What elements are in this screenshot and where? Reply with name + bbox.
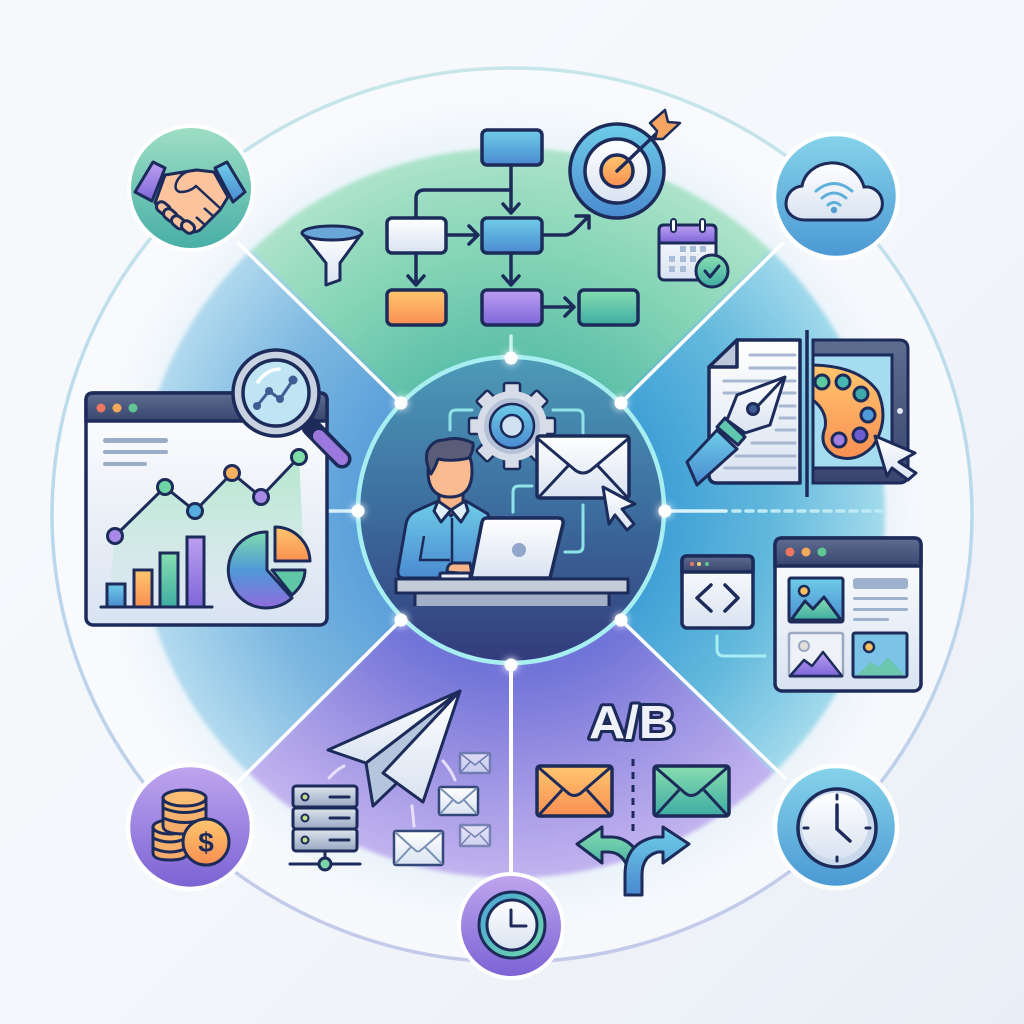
connector nodes — [352, 352, 672, 672]
neck — [439, 490, 463, 516]
spoke lines — [238, 243, 882, 880]
icon: paper plane — [328, 691, 460, 806]
panel halo — [119, 121, 903, 905]
collar — [434, 501, 468, 522]
left coin stack — [153, 820, 187, 860]
dashed divider — [632, 759, 634, 832]
panel: sending — [290, 691, 490, 870]
desk — [396, 579, 628, 606]
icon: coin stacks — [153, 790, 206, 860]
image tile 2 — [789, 633, 843, 677]
icon: orange envelope — [537, 766, 612, 816]
icon: gear — [469, 383, 555, 469]
connector lines — [450, 410, 583, 552]
icon: envelope — [537, 436, 629, 498]
line chart area — [108, 457, 306, 600]
icon: green envelope — [654, 766, 729, 816]
panel: analytics dashboard — [86, 350, 342, 625]
icon: funnel — [302, 226, 362, 285]
badge: right clock — [775, 766, 897, 888]
flowchart — [387, 130, 638, 325]
icon: pen nib — [687, 377, 785, 485]
layout text block — [853, 578, 908, 621]
flowchart boxes — [482, 130, 542, 165]
icon: web layout window — [775, 538, 921, 691]
segment: send and testing (purple) — [248, 622, 774, 880]
badge: cloud — [774, 134, 898, 258]
icon: envelope medium — [439, 787, 478, 815]
icon: server — [290, 786, 360, 870]
icon: cursor — [875, 436, 916, 480]
icon: split arrows — [577, 827, 689, 895]
browser window — [86, 393, 327, 625]
web window dots — [786, 548, 826, 556]
icon: laptop — [471, 518, 563, 578]
icon: target with arrow — [570, 110, 680, 218]
motion arcs — [329, 761, 455, 826]
A/B label: A/B — [589, 696, 675, 748]
icon: magnifier — [233, 350, 342, 459]
badge: handshake — [129, 126, 253, 250]
outer ring — [52, 68, 972, 962]
connector — [717, 636, 765, 656]
panel: code and web layout — [682, 538, 921, 691]
hair — [426, 439, 473, 474]
hand — [447, 563, 472, 574]
icon: cloud — [786, 163, 882, 220]
right coin stack — [163, 790, 206, 834]
figure: person at laptop — [398, 439, 500, 579]
pie chart — [228, 527, 310, 608]
panel: copywriting and design — [687, 330, 916, 497]
arm line — [420, 518, 452, 565]
code window dots — [690, 562, 709, 566]
window dots — [96, 404, 138, 412]
icon: handshake — [135, 162, 245, 235]
icon: progress clock — [479, 892, 545, 958]
torso — [398, 501, 500, 578]
icon: document — [709, 340, 800, 483]
icon: envelope faded top — [460, 753, 490, 773]
text placeholder lines — [103, 438, 168, 466]
central hub — [358, 357, 664, 663]
icon: dollar coin: $ — [198, 827, 214, 858]
hub disc — [358, 357, 664, 663]
icon: code window — [682, 556, 753, 628]
image tile 3 — [853, 633, 907, 677]
icon: envelope faded bottom — [460, 825, 490, 846]
head — [428, 445, 472, 497]
icon: cursor — [603, 487, 635, 530]
segment: analytics (blue) — [154, 250, 401, 774]
icon: envelope large — [394, 831, 443, 865]
panel: colored disc segments — [154, 147, 888, 880]
icon: palette — [813, 365, 883, 458]
icon: calendar with check — [659, 219, 728, 287]
panel: A/B testing — [537, 696, 729, 895]
segment: strategy (green) — [250, 147, 772, 398]
icon: clock — [798, 789, 876, 867]
document text lines — [724, 355, 795, 468]
icon: wifi — [816, 184, 852, 213]
divider — [805, 330, 809, 497]
bar chart — [101, 537, 212, 607]
icon: tablet — [813, 340, 908, 483]
image tile 1 — [789, 578, 843, 622]
segment: design and build (light blue) — [620, 249, 888, 774]
badge: budget coins — [128, 765, 252, 889]
line chart — [108, 450, 306, 544]
badge: bottom clock — [459, 874, 563, 978]
flowchart connectors — [408, 165, 589, 316]
